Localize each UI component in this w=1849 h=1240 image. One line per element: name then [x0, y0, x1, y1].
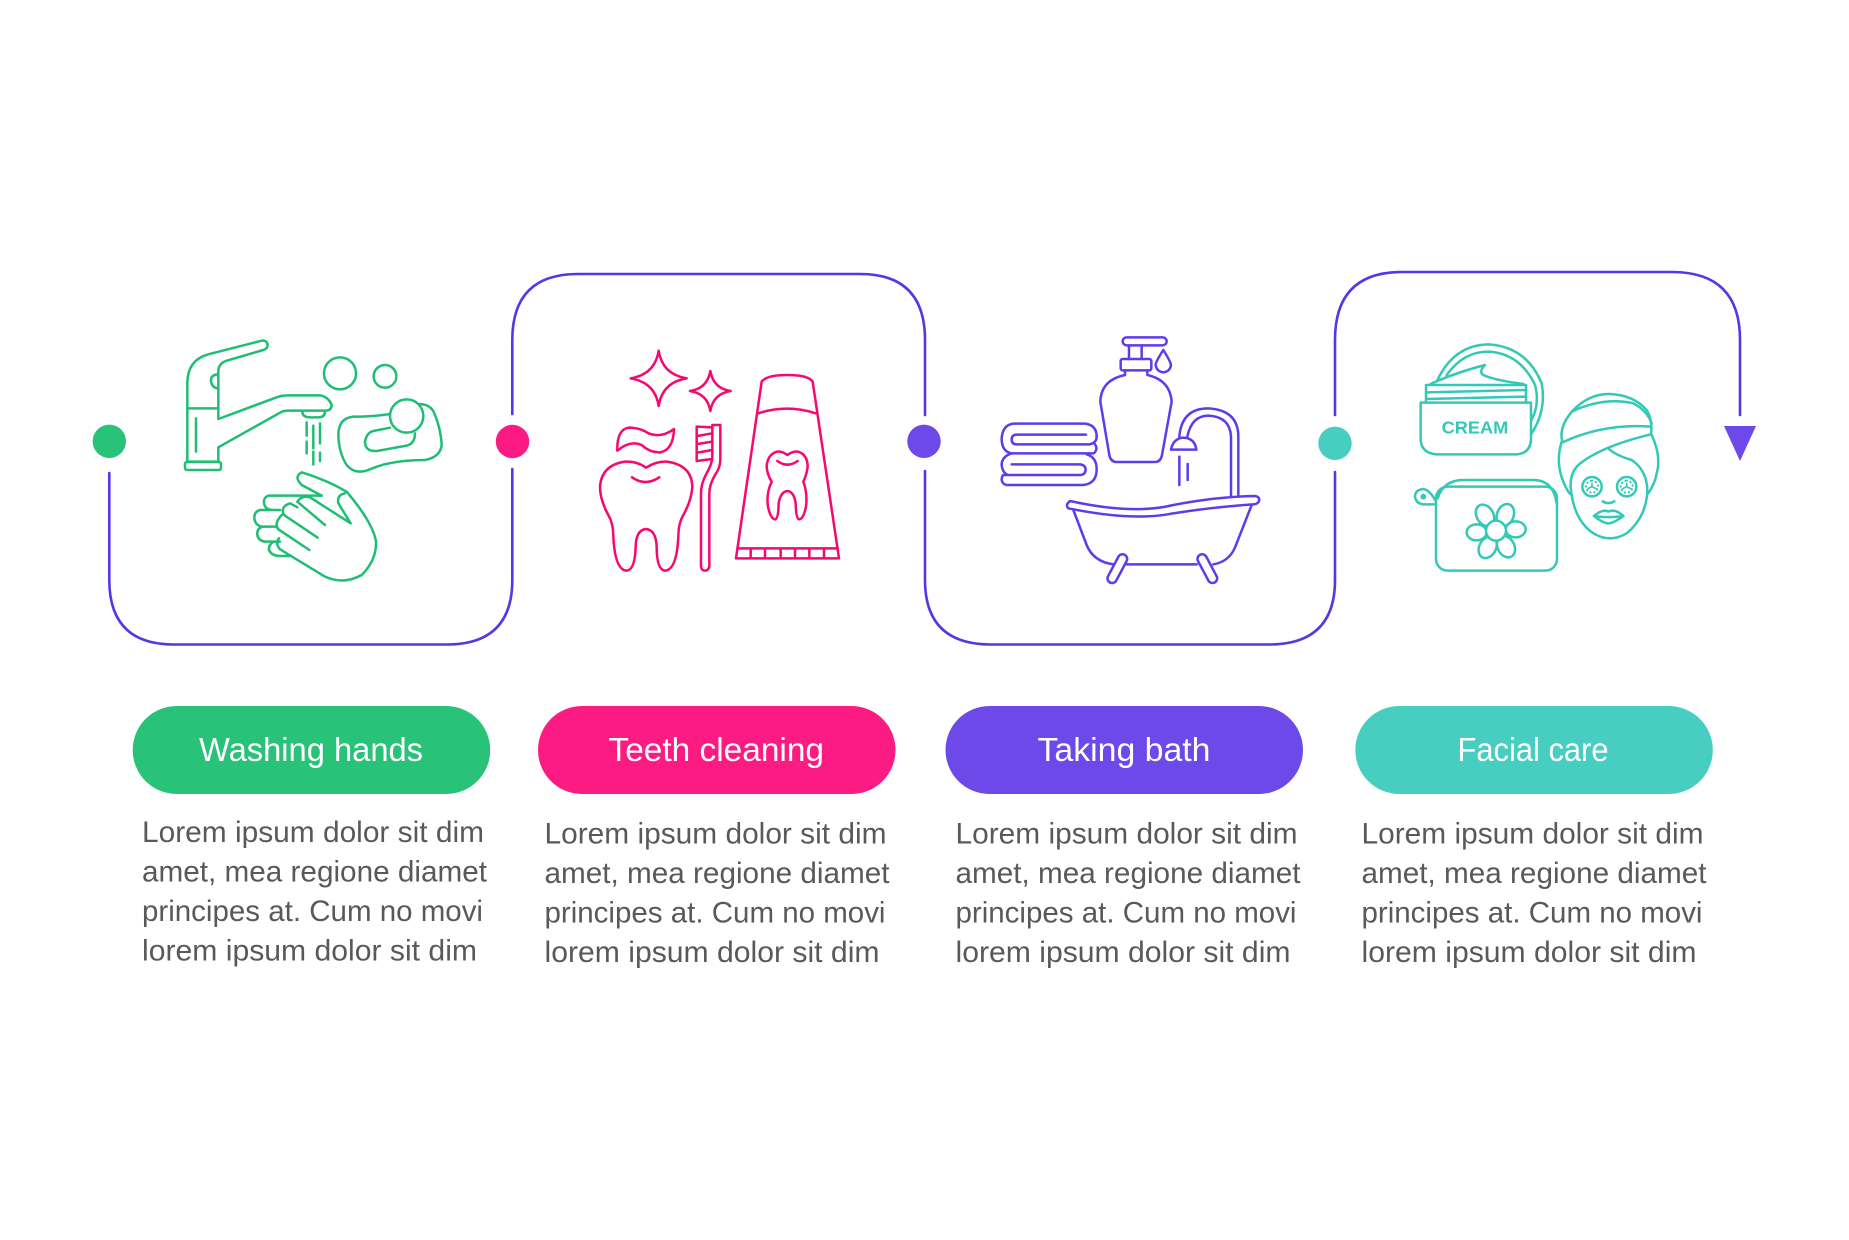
text block: Taking bath description: principes at. Cum no movi	[956, 896, 1296, 930]
text block: Facial care description: amet, mea regione diamet	[1362, 857, 1706, 890]
text block: Taking bath description: lorem ipsum dolor sit dim	[956, 936, 1290, 969]
text block: Washing hands description	[142, 816, 487, 968]
icon: taking bath	[1002, 337, 1259, 585]
label pill: Washing hands: Washing hands	[199, 731, 423, 768]
text block: Washing hands description: lorem ipsum dolor sit dim	[142, 934, 477, 968]
step marker: pink dot	[496, 425, 529, 458]
text block: Facial care description	[1362, 818, 1706, 969]
icon: washing hands	[185, 341, 442, 580]
timeline connector line	[109, 272, 1740, 644]
text block: Washing hands description: principes at. Cum no movi	[142, 895, 483, 928]
text block: Taking bath description: amet, mea regione diamet	[956, 857, 1300, 890]
label pill: Taking bath: Taking bath	[1038, 731, 1210, 768]
text block: Teeth cleaning description: principes at. Cum no movi	[544, 896, 886, 930]
icon: teeth cleaning	[600, 351, 839, 571]
text block: Teeth cleaning description: Lorem ipsum dolor sit dim	[544, 818, 886, 850]
text block: Washing hands description: amet, mea regione diamet	[142, 856, 487, 888]
step marker: teal dot	[1318, 427, 1352, 460]
text block: Facial care description: principes at. Cum no movi	[1362, 896, 1702, 930]
text block: Facial care description: lorem ipsum dolor sit dim	[1362, 936, 1696, 969]
label pill: Washing hands	[133, 706, 490, 794]
text block: Taking bath description: Lorem ipsum dolor sit dim	[956, 818, 1298, 850]
text block: Teeth cleaning description	[544, 818, 890, 969]
text block: Teeth cleaning description: lorem ipsum dolor sit dim	[544, 936, 880, 969]
label pill: Facial care: Facial care	[1458, 731, 1608, 768]
label pill: Facial care	[1355, 706, 1713, 794]
step marker: green dot	[93, 425, 126, 458]
text block: Taking bath description	[956, 818, 1300, 969]
label pill: Teeth cleaning: Teeth cleaning	[608, 731, 824, 768]
icon: facial care	[1415, 344, 1658, 571]
text block: Washing hands description: Lorem ipsum dolor sit dim	[142, 816, 484, 849]
step marker: purple dot	[907, 425, 941, 458]
arrow head	[1724, 426, 1756, 461]
label pill: Taking bath	[946, 706, 1303, 794]
text block: Facial care description: Lorem ipsum dolor sit dim	[1362, 818, 1704, 850]
label pill: Teeth cleaning	[538, 706, 896, 794]
text block: Teeth cleaning description: amet, mea regione diamet	[544, 857, 890, 890]
icon: facial care: CREAM	[1442, 417, 1508, 437]
